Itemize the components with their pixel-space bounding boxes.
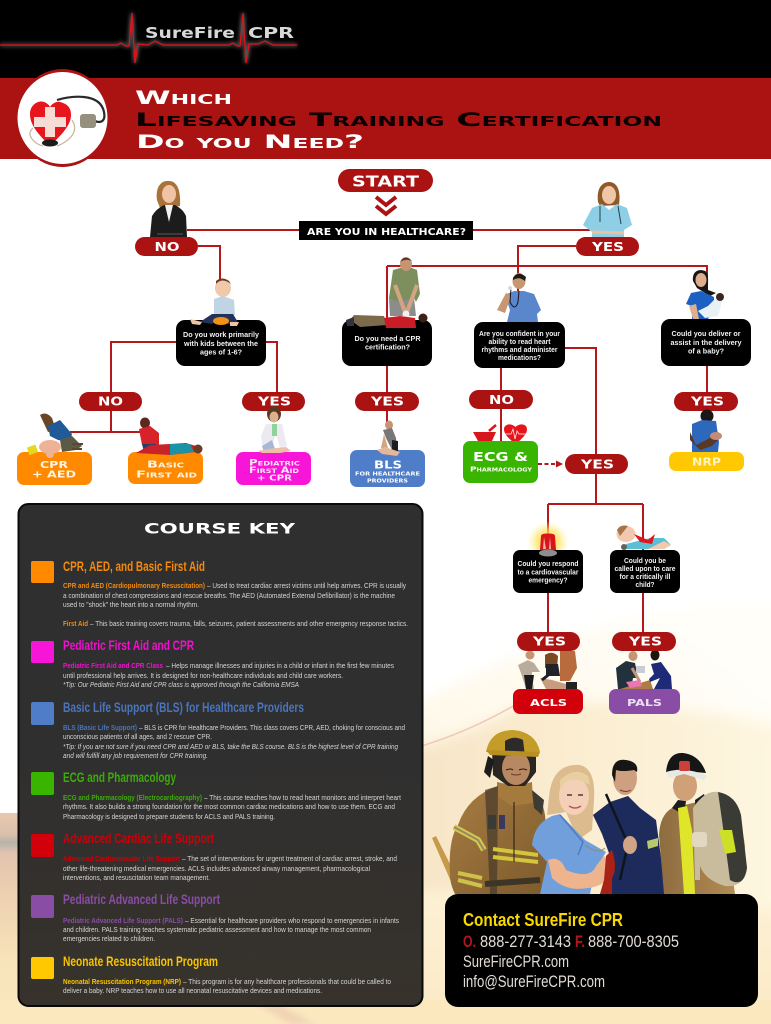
yes pill: kids <box>242 392 305 411</box>
photo: businesswoman <box>150 181 187 237</box>
photo: nurse <box>583 182 632 237</box>
course box: pediatric first aid + CPR: + CPR <box>257 474 292 482</box>
key entry: PALS: Pediatric Advanced Life Support <box>63 891 220 907</box>
key entry: BLS: and will fulfill any job requirement for CPR training. <box>63 751 208 760</box>
course box: pediatric first aid + CPR: First Aid <box>249 466 299 476</box>
course box: CPR + AED: + AED <box>32 470 76 480</box>
key entry: pediatric first aid: *Tip: Our Pediatric First Aid and CPR class is approved through the California EMSA <box>63 680 299 689</box>
no pill: not healthcare: NO <box>154 239 180 254</box>
header black band <box>0 0 771 78</box>
yes pill: healthcare <box>576 237 639 256</box>
yes pill: after ECG: YES <box>580 456 614 472</box>
key entry: ACLS: other life-threatening medical emergencies. ACLS includes advanced airway management, pharmacological <box>63 864 370 873</box>
course box: PALS: PALS <box>627 698 662 709</box>
question: are you in healthcare: ARE YOU IN HEALTHCARE? <box>307 227 466 238</box>
yes pill: cardiovascular: YES <box>532 634 566 648</box>
key entry: BLS: BLS (Basic Life Support) <box>63 723 137 732</box>
question: kids 1-6: Do you work primarily <box>183 330 260 339</box>
key entry: BLS: Basic Life Support (BLS) for Healthcare Providers <box>63 699 304 715</box>
key entry: CPR AED first aid: CPR, AED, and Basic First Aid <box>63 558 205 574</box>
key entry: NRP: Neonatal Resuscitation Program (NRP) <box>63 977 181 986</box>
no pill: not kids: NO <box>98 394 123 408</box>
title text: Do you Need? <box>136 131 364 153</box>
no pill: not healthcare <box>135 237 198 256</box>
question: kids 1-6: ages of 1-6? <box>200 348 242 356</box>
key entry: CPR AED first aid <box>31 558 408 628</box>
key entry: ACLS: Advanced Cardiac Life Support <box>63 830 214 846</box>
key entry: CPR AED first aid: First Aid <box>63 619 88 628</box>
logo: SureFire CPR: CPR <box>248 24 295 42</box>
course box: ACLS: ACLS <box>530 698 567 709</box>
photo: first aid rescuer <box>136 418 202 455</box>
panel: contact SureFire CPR <box>445 894 758 1007</box>
course box: pediatric first aid + CPR: Pediatric <box>249 458 301 468</box>
panel: contact SureFire CPR: 888-277-3143 <box>480 932 571 951</box>
key entry: ECG: ECG and Pharmacology <box>63 769 176 785</box>
course box: PALS <box>609 689 680 714</box>
icon: mortar and pestle <box>473 425 496 444</box>
photo: pediatric rescuer <box>258 406 291 453</box>
key entry: PALS <box>31 891 399 943</box>
key entry: pediatric first aid: Pediatric First Aid and CPR <box>63 637 194 653</box>
course box: BLS: FOR HEALTHCARE <box>355 472 420 478</box>
key entry: pediatric first aid: until professional help arrives. It is designed for non-healthcare individuals and child care workers. <box>63 671 343 680</box>
question: heart rhythms: Are you confident in your <box>479 329 560 338</box>
flowchart connector lines <box>70 230 707 632</box>
yes pill: after ECG <box>565 454 628 474</box>
no pill: heart rhythms: NO <box>489 392 514 407</box>
key entry: NRP: Neonate Resuscitation Program <box>63 953 218 969</box>
question: delivery of a baby <box>661 319 751 366</box>
key entry: ACLS: – The set of interventions for urgent treatment of cardiac arrest, stroke, and <box>182 854 397 863</box>
question: heart rhythms <box>474 322 565 368</box>
nurse in blue scrubs <box>532 765 614 894</box>
logo: SureFire CPR: SureFire <box>145 24 235 42</box>
start pill: START <box>352 172 420 190</box>
title text: Which <box>135 87 232 109</box>
question: critically ill child: for a critically ill <box>620 572 670 581</box>
photo: emergency responders group <box>432 730 747 894</box>
key entry: CPR AED first aid: used to "shock" the heart into a normal rhythm. <box>63 600 199 609</box>
photo: child patient <box>616 526 671 550</box>
course box: NRP <box>669 452 744 471</box>
photo: doctor with stethoscope <box>497 273 541 322</box>
key entry: NRP <box>31 953 391 995</box>
key entry: CPR AED first aid: a combination of chest compressions and rescue breaths. The AED (Automated External Defibrillator) is the machine <box>63 591 395 600</box>
yes pill: CPR cert: YES <box>370 394 404 408</box>
course box: CPR + AED: CPR <box>40 460 69 471</box>
question: delivery of a baby: Could you deliver or <box>672 329 741 338</box>
course box: CPR + AED <box>17 452 92 485</box>
course box: ECG and pharmacology: Pharmacology <box>470 466 532 474</box>
icon: heart and stethoscope medallion <box>16 69 108 167</box>
panel: contact SureFire CPR: O. <box>463 932 476 951</box>
photo: PALS team <box>616 650 672 689</box>
key entry: ECG: Pharmacology is designed to prepare students for ACLS and PALS training. <box>63 812 275 821</box>
key entry: PALS: and children. PALS training teaches systematic pediatric assessment and how to manage the most common <box>63 925 371 934</box>
key entry: NRP: – This program is for any healthcare professionals that could be called to <box>183 977 391 986</box>
question: need CPR cert: Do you need a CPR <box>354 334 421 343</box>
yes pill: critically ill child <box>612 632 676 651</box>
key entry: BLS: – BLS is CPR for Healthcare Providers. This class covers CPR, AED, choking for conscious and <box>139 723 405 732</box>
course box: BLS <box>350 450 425 487</box>
title text: Lifesaving Training Certification <box>135 109 662 131</box>
yes pill: delivery <box>674 392 738 411</box>
question: cardiovascular emergency: Could you respond <box>518 559 579 568</box>
question: critically ill child: Could you be <box>624 556 666 565</box>
firefighter with fire hose <box>659 753 747 894</box>
question: kids 1-6 <box>176 320 266 366</box>
course box: basic first aid: Basic <box>147 460 184 470</box>
icon: double chevron down <box>376 197 396 214</box>
icon: heart with ECG trace <box>504 424 527 444</box>
technician in navy coverall <box>593 760 668 894</box>
yes pill: CPR cert <box>355 392 419 411</box>
course box: ECG and pharmacology <box>463 441 538 483</box>
photo: mother nurse with baby <box>686 270 724 319</box>
question: kids 1-6: with kids between the <box>183 339 258 348</box>
start pill <box>338 169 433 192</box>
question: delivery of a baby: of a baby? <box>688 346 724 356</box>
question: heart rhythms: ability to read heart <box>488 337 551 346</box>
photo: NRP provider with newborn <box>690 410 722 452</box>
panel: contact SureFire CPR: 888-700-8305 <box>588 932 679 951</box>
course box: pediatric first aid + CPR <box>236 452 311 485</box>
title text <box>135 87 662 153</box>
key entry: PALS: – Essential for healthcare providers who respond to emergencies in infants <box>185 916 399 925</box>
key entry: BLS: *Tip: If you are not sure if you need CPR and AED or BLS, take the BLS course. BLS is the highest level of CPR training <box>63 742 399 751</box>
question: need CPR cert: certification? <box>365 342 410 352</box>
panel: contact SureFire CPR: F. <box>575 932 585 951</box>
key entry: pediatric first aid: – Helps manage illnesses and injuries in a child or infant in the first few minutes <box>166 661 394 670</box>
yes pill: cardiovascular <box>517 632 580 651</box>
photo: CPR provider kneeling over patient <box>346 257 428 328</box>
key entry: BLS <box>31 699 405 760</box>
photo: BLS provider <box>377 420 400 456</box>
question: cardiovascular emergency: emergency? <box>528 576 568 584</box>
key entry: ECG: rhythms. It also builds a strong foundation for the most common cardiac medications and how to use them. ECG and <box>63 802 395 811</box>
question: cardiovascular emergency <box>513 550 583 593</box>
arrow head <box>556 460 563 468</box>
no pill: not kids <box>79 392 142 411</box>
logo: SureFire CPR <box>0 13 297 63</box>
photo: toddler <box>190 278 239 326</box>
no pill: heart rhythms <box>469 390 533 409</box>
key entry: CPR AED first aid: – Used to treat cardiac arrest victims until help arrives. CPR is usually <box>207 581 406 590</box>
course box: ECG and pharmacology: ECG & <box>473 450 528 464</box>
key entry: NRP: deliver a baby. NRP teaches how to use all neonatal resuscitative devices and medications. <box>63 986 322 995</box>
key entry: pediatric first aid: Pediatric First Aid and CPR Class <box>63 661 163 670</box>
course box: BLS: PROVIDERS <box>367 478 408 484</box>
panel: contact SureFire CPR: info@SureFireCPR.com <box>463 972 605 991</box>
key entry: CPR AED first aid: – This basic training covers trauma, falls, seizures, patient assessments and other emergency response tactics. <box>90 619 408 628</box>
question: delivery of a baby: assist in the delivery <box>670 338 742 347</box>
question: need CPR cert <box>342 320 432 366</box>
course box: BLS: BLS <box>374 458 402 472</box>
key entry: ACLS <box>31 830 397 882</box>
yes pill: healthcare: YES <box>591 239 624 254</box>
key entry: CPR AED first aid: CPR and AED (Cardiopulmonary Resuscitation) <box>63 581 205 590</box>
question: heart rhythms: rhythms and administer <box>482 345 558 354</box>
arrow: ECG to ACLS/PALS <box>538 463 556 465</box>
key entry: pediatric first aid <box>31 637 394 689</box>
key entry: ACLS: interventions, and resuscitation team management. <box>63 873 210 882</box>
question: critically ill child: child? <box>636 580 655 589</box>
panel: contact SureFire CPR: Contact SureFire CPR <box>463 910 623 930</box>
course box: basic first aid: First aid <box>136 470 197 480</box>
panel: course key <box>18 504 422 1006</box>
course key heading: COURSE KEY <box>144 522 296 538</box>
question: critically ill child <box>610 550 680 593</box>
icon: siren glow <box>527 521 569 563</box>
course box: basic first aid <box>128 452 203 484</box>
key entry: ECG: ECG and Pharmacology (Electrocardiography) <box>63 793 202 802</box>
yes pill: critically ill child: YES <box>628 634 662 648</box>
question: are you in healthcare <box>299 221 473 240</box>
panel: contact SureFire CPR: SureFireCPR.com <box>463 952 569 971</box>
key entry: ACLS: Advanced Cardiovascular Life Support <box>63 854 180 863</box>
question: critically ill child: called upon to care <box>614 564 676 573</box>
key entry: PALS: Pediatric Advanced Life Support (PALS) <box>63 916 183 925</box>
key entry: BLS: unconscious patients of all ages, and 2 rescuer CPR. <box>63 732 212 741</box>
icon: emergency siren <box>539 534 557 556</box>
yes pill: delivery: YES <box>690 394 724 408</box>
key entry: ECG <box>31 769 401 821</box>
question: heart rhythms: medications? <box>498 353 541 362</box>
yes pill: kids: YES <box>257 394 291 408</box>
photo: CPR and AED rescuer <box>27 414 83 458</box>
photo: ACLS team <box>518 650 577 689</box>
key entry: ECG: – This course teaches how to read heart monitors and interpret heart <box>204 793 401 802</box>
course box: NRP: NRP <box>692 456 721 468</box>
firefighter in turnout gear <box>432 730 552 894</box>
question: cardiovascular emergency: to a cardiovascular <box>518 568 579 576</box>
key entry: PALS: emergencies related to children. <box>63 934 155 943</box>
course box: ACLS <box>513 689 583 714</box>
title band <box>0 78 771 159</box>
